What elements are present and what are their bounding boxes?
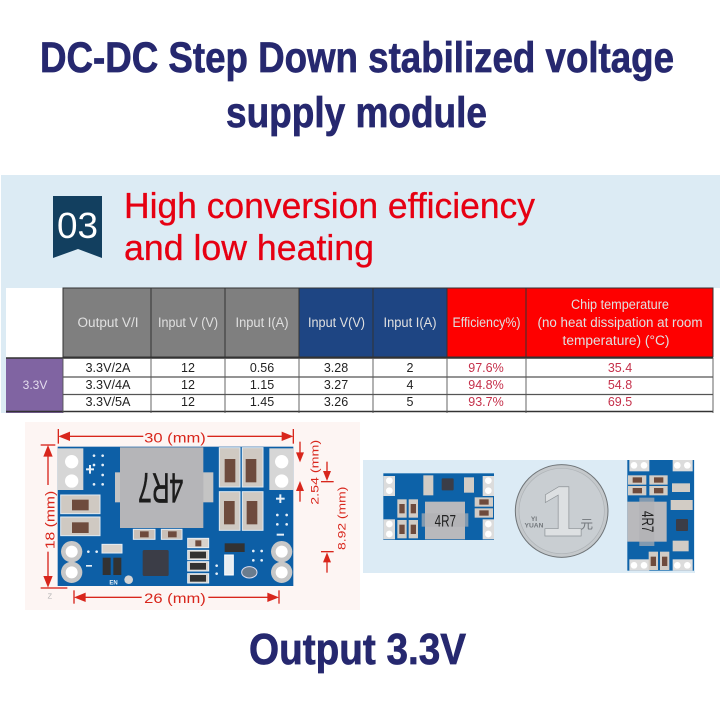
photo: dimensioned module [25,422,360,610]
table header: Input V (V) [158,315,218,330]
table rows: 1.45 [250,395,274,409]
table header: (no heat dissipation at room [538,315,702,330]
table rows: 4 [407,378,414,392]
icon: 03 ribbon badge: 03 [57,205,98,246]
heading: high conversion efficiency: High conversion efficiency [124,185,535,226]
row label: 3.3V [6,358,63,413]
dimension: 18 mm [41,444,67,589]
module board [58,447,293,586]
coin [515,465,608,557]
panel: efficiency [1,175,720,413]
silk marks [86,454,288,575]
dimension: 26 mm [73,590,280,606]
table rows: 12 [181,395,195,409]
heading: high conversion efficiency: and low heating [124,227,374,268]
vertical module [627,460,694,571]
table rows [6,358,713,413]
heading: high conversion efficiency [124,185,535,268]
module board: 4R7 [138,465,183,512]
table rows: 3.3V/2A [86,361,131,375]
photo: module size with coin [363,460,695,573]
dimension: 30 mm: 30 (mm) [144,429,206,445]
table header: Chip temperature [571,297,669,312]
table rows: 93.7% [468,395,504,409]
dimension: 30 mm [58,429,294,445]
table rows: 0.56 [250,361,274,375]
chip [143,550,169,576]
coin: YI [531,516,537,523]
title: supply module [226,89,487,137]
table header: Output V/I [78,315,138,330]
vertical module: 4R7 [638,511,657,532]
dimension: 26 mm: 26 (mm) [144,590,206,606]
dimension: 2.54 mm [296,440,322,505]
table header: Efficiency%) [452,315,520,330]
caption: output 3.3V: Output 3.3V [249,625,467,674]
inductor [115,472,213,502]
table rows: 97.6% [468,361,504,375]
dimension: 8.92 mm: 8.92 (mm) [336,487,348,550]
table rows: 5 [407,395,414,409]
table rows: 94.8% [468,378,504,392]
table rows: 2 [407,361,414,375]
capacitors [61,448,263,536]
table header [63,288,713,357]
dimension: 18 mm: 18 (mm) [43,491,58,549]
table header: Input I(A) [384,315,436,330]
pads [58,448,83,490]
title [40,34,674,137]
table rows: 54.8 [608,378,632,392]
table rows: 12 [181,361,195,375]
horizontal module [383,473,494,540]
axis mark: Z [48,591,53,600]
coin: 元 [580,518,593,532]
efficiency table [6,288,713,413]
table header: Input I(A) [236,315,288,330]
small parts [133,529,155,539]
table rows: 35.4 [608,361,632,375]
dimension: 2.54 mm: 2.54 (mm) [310,440,322,505]
table rows: 69.5 [608,395,632,409]
row label: 3.3V: 3.3V [23,378,47,392]
coin: YUAN [525,523,544,530]
coin: 1 [540,472,583,552]
table header: temperature) (°C) [562,333,670,348]
table rows: 3.3V/5A [86,395,131,409]
module board: EN [109,580,118,586]
table rows: 3.27 [324,378,348,392]
table header: Input V(V) [308,315,365,330]
table rows: 12 [181,378,195,392]
icon: 03 ribbon badge [53,196,102,258]
table rows: 3.26 [324,395,348,409]
table rows: 3.28 [324,361,348,375]
dimension: 8.92 mm [321,462,348,573]
table rows: 3.3V/4A [86,378,131,392]
table rows: 1.15 [250,378,274,392]
horizontal module: 4R7 [435,512,456,531]
